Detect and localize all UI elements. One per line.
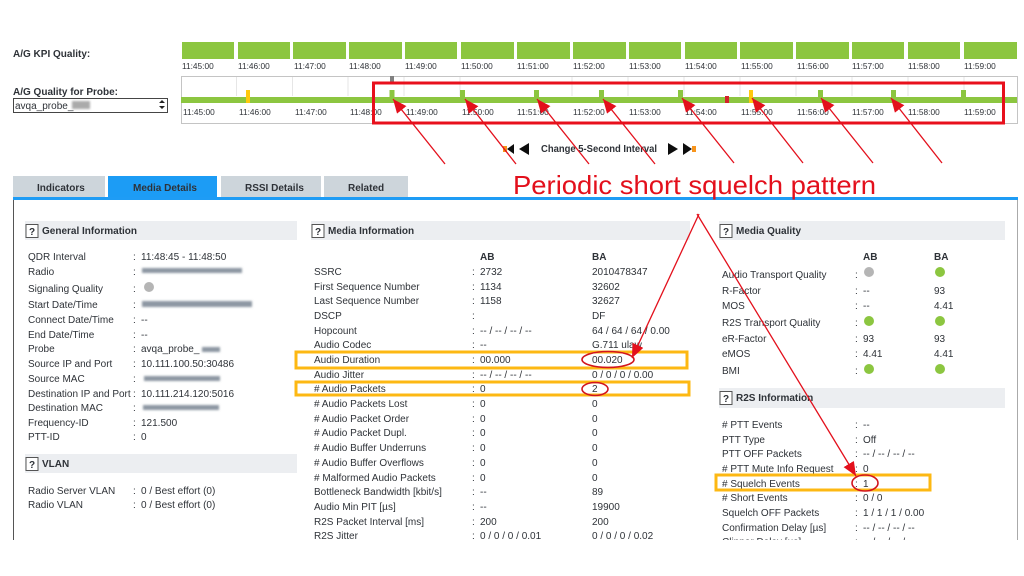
media information rows: 0 [592,458,598,469]
media information rows: : [472,487,475,498]
general information rows: Source IP and Port [28,359,113,370]
media quality rows: Audio Transport Quality [722,270,826,281]
R2S information rows: : [855,537,858,548]
media information rows: 2732 [480,267,503,278]
KPI time labels: 11:52:00 [573,61,605,71]
probe selector: A/G Quality for Probe: [13,87,118,98]
media information rows: 0 [480,428,486,439]
VLAN rows: : [133,486,136,497]
media information rows: 0 [480,458,486,469]
media information rows: # Malformed Audio Packets [314,473,436,484]
media information rows: -- [480,340,487,351]
media information rows: 1134 [480,282,502,293]
redacted values [142,268,252,410]
highlight: squelch events row [716,475,930,490]
R2S information rows: Off [863,435,876,446]
media quality rows: : [855,301,858,312]
timeline: A/G KPI quality [13,42,1017,71]
R2S information rows: : [855,479,858,490]
media quality rows: R-Factor [722,286,762,297]
media information rows: 0 [480,414,486,425]
probe time labels: 11:52:00 [573,107,605,117]
probe time labels: 11:45:00 [183,107,215,117]
media information rows: 0 [480,384,486,395]
media quality rows [722,252,954,377]
media information rows: : [472,473,475,484]
general information rows: : [133,389,136,400]
R2S information rows: -- / -- / -- / -- [863,537,915,548]
media information rows: SSRC [314,267,342,278]
media quality rows: 93 [863,334,875,345]
media information rows: : [472,443,475,454]
media information rows: DSCP [314,311,342,322]
media information rows: 2 [592,384,598,395]
R2S information rows: 0 / 0 [863,493,883,504]
general information rows: avqa_probe_ [141,344,200,355]
interval navigation: Change 5-Second Interval [541,144,657,155]
media information rows: 0 [592,414,598,425]
R2S information rows: : [855,449,858,460]
general information rows: Connect Date/Time [28,315,114,326]
R2S information rows: -- / -- / -- / -- [863,449,915,460]
media information rows: : [472,414,475,425]
probe time labels: 11:50:00 [462,107,494,117]
media information rows: R2S Packet Interval [ms] [314,517,424,528]
heading: VLAN [25,454,297,473]
KPI time labels: 11:46:00 [238,61,270,71]
media information rows: 0 / 0 / 0 / 0.01 [480,531,542,542]
general information rows: 121.500 [141,418,178,429]
KPI time labels: 11:45:00 [182,61,214,71]
media information rows: Bottleneck Bandwidth [kbit/s] [314,487,442,498]
R2S information rows: -- [863,420,870,431]
media quality rows: : [855,349,858,360]
media information rows: 200 [480,517,497,528]
general information rows: Destination IP and Port [28,389,131,400]
KPI time labels: 11:55:00 [741,61,773,71]
R2S information rows: # PTT Events [722,420,782,431]
media information rows: -- / -- / -- / -- [480,370,532,381]
heading: media information: Media Information [328,226,414,237]
media information rows: 0 [592,399,598,410]
media information rows: 1158 [480,296,502,307]
R2S information rows: PTT OFF Packets [722,449,802,460]
media quality rows: : [855,318,858,329]
media quality rows: R2S Transport Quality [722,318,820,329]
media information rows: # Audio Buffer Underruns [314,443,426,454]
KPI time labels: 11:59:00 [964,61,996,71]
probe time labels: 11:53:00 [629,107,661,117]
media quality rows: eR-Factor [722,334,767,345]
highlight: audio packets row [296,382,689,395]
VLAN rows: 0 / Best effort (0) [141,500,215,511]
signaling quality dot [144,282,154,292]
media quality rows: MOS [722,301,745,312]
media information rows: 0 / 0 / 0 / 0.00 [592,370,654,381]
R2S information rows: 0 [863,464,869,475]
tabs [13,176,408,198]
media quality rows: BA [934,252,948,263]
general information rows: PTT-ID [28,432,60,443]
general information rows: : [133,418,136,429]
heading: R2S information [719,388,1005,408]
general information rows: Frequency-ID [28,418,89,429]
media information rows: G.711 ulaw [592,340,643,351]
heading: general information: ? [29,227,35,238]
media information rows: # Audio Packets [314,384,386,395]
timeline: A/G KPI quality: A/G KPI Quality: [13,49,90,60]
VLAN rows: Radio Server VLAN [28,486,115,497]
general information rows: 10.111.100.50:30486 [141,359,234,370]
media information rows: Last Sequence Number [314,296,420,307]
R2S information rows: # Short Events [722,493,788,504]
media information rows: # Audio Packet Order [314,414,410,425]
circle: audio packets value [582,382,608,396]
general information rows: QDR Interval [28,252,86,263]
general information rows: 11:48:45 - 11:48:50 [141,252,227,263]
general information rows: : [133,267,136,278]
probe time labels: 11:46:00 [239,107,271,117]
callout: periodic short squelch pattern: Periodic short squelch pattern [513,170,876,200]
heading: general information: General Information [42,226,137,237]
general information rows: Probe [28,344,55,355]
media information rows: : [472,517,475,528]
media quality rows: : [855,286,858,297]
media information rows: : [472,428,475,439]
VLAN rows [28,486,215,511]
heading: media quality [719,221,1005,240]
media information rows: -- / -- / -- / -- [480,326,532,337]
media information rows: Audio Jitter [314,370,365,381]
KPI quality bars [182,42,1017,59]
KPI time labels: 11:48:00 [349,61,381,71]
media quality rows: 4.41 [934,349,954,360]
media information rows: 0 / 0 / 0 / 0.02 [592,531,654,542]
media information rows: : [472,311,475,322]
KPI time labels: 11:56:00 [797,61,829,71]
arrows: callout to detail values [632,214,856,476]
media information rows: R2S Jitter [314,531,359,542]
general information rows: -- [141,330,148,341]
media information rows: 32627 [592,296,620,307]
general information rows: Start Date/Time [28,300,98,311]
probe event markers [246,76,966,103]
tabs: RSSI Details [245,183,304,194]
media information rows [314,252,670,542]
heading: media information [311,221,690,240]
media quality rows: 4.41 [934,301,954,312]
R2S information rows: -- / -- / -- / -- [863,523,915,534]
KPI time labels: 11:51:00 [517,61,549,71]
general information rows: Source MAC [28,374,85,385]
probe green quality strip [181,97,1017,103]
probe time labels: 11:47:00 [295,107,327,117]
R2S information rows: 1 / 1 / 1 / 0.00 [863,508,925,519]
heading: media quality: ? [723,227,729,238]
general information rows: : [133,252,136,263]
probe time labels: 11:57:00 [852,107,884,117]
general information rows: : [133,284,136,295]
media information rows: AB [480,252,494,263]
general information rows: Radio [28,267,55,278]
KPI time labels: 11:50:00 [461,61,493,71]
panel: media quality [719,221,1005,377]
R2S information rows: : [855,420,858,431]
R2S information rows [722,420,925,548]
media information rows: : [472,458,475,469]
media information rows: 0 [592,443,598,454]
media information rows: : [472,296,475,307]
KPI time labels: 11:49:00 [405,61,437,71]
media information rows: 2010478347 [592,267,648,278]
R2S information rows: : [855,464,858,475]
media quality status dots [864,267,945,374]
R2S information rows: PTT Type [722,435,765,446]
media information rows: 0 [480,399,486,410]
media information rows: : [472,399,475,410]
media quality rows: : [855,270,858,281]
R2S information rows: Clipper Delay [µs] [722,537,801,548]
general information rows: : [133,315,136,326]
media quality rows: 93 [934,334,946,345]
probe time labels: 11:51:00 [517,107,549,117]
probe time labels: 11:55:00 [741,107,773,117]
media information rows: 200 [592,517,609,528]
media information rows: 64 / 64 / 64 / 0.00 [592,326,670,337]
general information rows: Destination MAC [28,403,103,414]
probe time labels: 11:56:00 [797,107,829,117]
probe time labels: 11:59:00 [964,107,996,117]
R2S information rows: 1 [863,479,869,490]
media information rows: : [472,370,475,381]
general information rows: : [133,403,136,414]
media information rows: First Sequence Number [314,282,420,293]
panel: general information [25,221,297,511]
interval navigation [503,143,696,155]
general information rows [28,252,234,443]
highlight: squelch pattern rectangle [374,83,1004,123]
probe time labels: 11:48:00 [350,107,382,117]
heading: VLAN: VLAN [42,459,69,470]
tabs: Related [348,183,384,194]
media information rows: 00.020 [592,355,623,366]
media information rows: -- [480,487,487,498]
media information rows: : [472,531,475,542]
media quality rows: : [855,334,858,345]
media information rows: 32602 [592,282,620,293]
heading: media information: ? [315,227,321,238]
media information rows: : [472,340,475,351]
media information rows: BA [592,252,606,263]
media information rows: 00.000 [480,355,511,366]
media information rows: Hopcount [314,326,357,337]
general information rows: : [133,432,136,443]
general information rows: 0 [141,432,147,443]
media information rows: 0 [592,473,598,484]
KPI time labels: 11:58:00 [908,61,940,71]
general information rows: End Date/Time [28,330,95,341]
general information rows: : [133,344,136,355]
media information rows: 0 [592,428,598,439]
media information rows: 0 [480,473,486,484]
media information rows: : [472,267,475,278]
media information rows: : [472,282,475,293]
media quality rows: eMOS [722,349,751,360]
probe selector: avqa_probe_ [15,101,74,112]
circle: audio duration value [582,352,634,368]
R2S information rows: : [855,508,858,519]
highlight: audio duration row [296,352,687,368]
general information rows: : [133,374,136,385]
media information rows: : [472,326,475,337]
media quality rows: 93 [934,286,946,297]
R2S information rows: Confirmation Delay [µs] [722,523,826,534]
media information rows: # Audio Packets Lost [314,399,408,410]
R2S information rows: : [855,523,858,534]
media quality rows: : [855,366,858,377]
media information rows: -- [480,502,487,513]
tabs: Indicators [37,183,85,194]
arrows: timeline squelch markers [393,98,942,164]
media information rows: : [472,384,475,395]
heading: general information [25,221,297,240]
KPI time labels [182,61,996,71]
details panel frame [13,197,1018,540]
KPI time labels: 11:53:00 [629,61,661,71]
panel: R2S information [719,388,1005,548]
KPI time labels: 11:47:00 [294,61,326,71]
media quality rows: AB [863,252,877,263]
VLAN rows: Radio VLAN [28,500,83,511]
probe time labels: 11:58:00 [908,107,940,117]
R2S information rows: # PTT Mute Info Request [722,464,834,475]
general information rows: : [133,330,136,341]
probe time labels: 11:49:00 [406,107,438,117]
panel: media information [311,221,690,542]
R2S information rows: : [855,435,858,446]
KPI time labels: 11:54:00 [685,61,717,71]
media information rows: 19900 [592,502,620,513]
VLAN rows: 0 / Best effort (0) [141,486,215,497]
heading: R2S information: R2S Information [736,393,813,404]
probe time labels [183,107,996,117]
media information rows: # Audio Buffer Overflows [314,458,424,469]
media quality rows: -- [863,286,870,297]
media information rows: Audio Codec [314,340,371,351]
general information rows: -- [141,315,148,326]
general information rows: 10.111.214.120:5016 [141,389,234,400]
media information rows: 0 [480,443,486,454]
general information rows: : [133,359,136,370]
media quality rows: 4.41 [863,349,883,360]
media information rows: : [472,502,475,513]
tabs: Media Details [133,183,197,194]
KPI time labels: 11:57:00 [852,61,884,71]
R2S information rows: : [855,493,858,504]
general information rows: : [133,300,136,311]
media information rows: Audio Duration [314,355,380,366]
heading: VLAN: ? [29,460,35,471]
timeline: probe quality [181,76,1018,124]
R2S information rows: # Squelch Events [722,479,800,490]
R2S information rows: Squelch OFF Packets [722,508,819,519]
VLAN rows: : [133,500,136,511]
media quality rows: BMI [722,366,740,377]
media information rows: : [472,355,475,366]
heading: R2S information: ? [723,394,729,405]
media information rows: # Audio Packet Dupl. [314,428,407,439]
media information rows: 89 [592,487,604,498]
general information rows: Signaling Quality [28,284,103,295]
probe selector [13,87,168,112]
probe time labels: 11:54:00 [685,107,717,117]
circle: squelch events value [852,475,878,491]
media information rows: DF [592,311,605,322]
heading: media quality: Media Quality [736,226,801,237]
media information rows: Audio Min PIT [µs] [314,502,396,513]
media quality rows: -- [863,301,870,312]
